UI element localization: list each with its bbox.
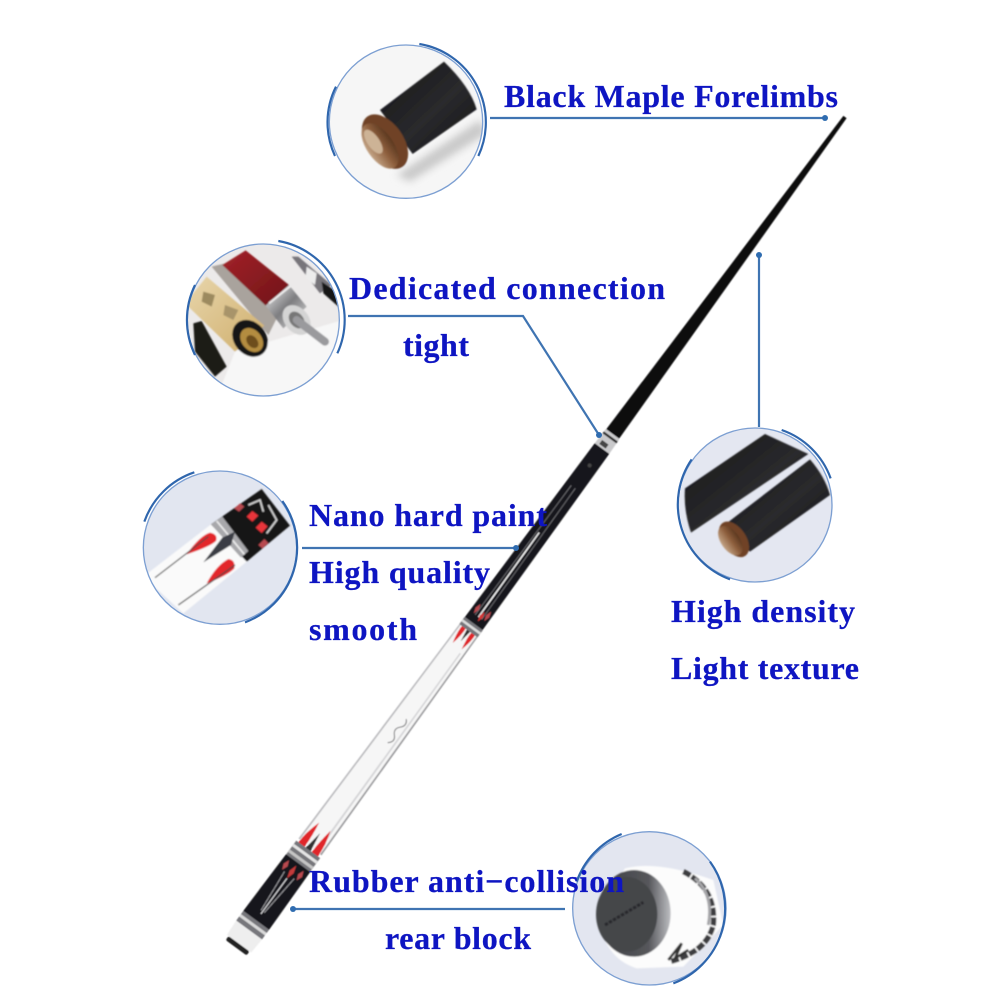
label: black maple forelimbs: Black Maple Forelimbs xyxy=(504,78,838,114)
white butt sleeve with red flames xyxy=(297,622,480,858)
lower black wrap xyxy=(243,854,311,930)
butt ring xyxy=(236,911,269,939)
photo circle: rubber rear block xyxy=(573,832,726,985)
label: rubber anti-collision rear block: Rubber anti−collision xyxy=(309,863,624,899)
callout line: black maple forelimbs xyxy=(490,115,828,121)
label: high density light texture: High density xyxy=(671,593,855,629)
callout line: dedicated connection xyxy=(348,316,602,438)
label: high density light texture: Light texture xyxy=(671,650,859,686)
label: rubber anti-collision rear block xyxy=(309,863,624,956)
photo circle: nano paint inlay xyxy=(143,471,297,624)
joint: silver connection xyxy=(595,429,620,454)
label: nano hard paint high quality smooth: High quality xyxy=(309,554,490,590)
photo circle: shaft pair xyxy=(678,428,832,582)
label: dedicated connection tight xyxy=(349,270,665,363)
billiard cue xyxy=(223,108,858,957)
white butt cap xyxy=(226,921,262,953)
butt collar xyxy=(286,841,320,872)
photo circle: shaft tip xyxy=(328,44,487,198)
cue shaft: black maple forelimb xyxy=(606,112,851,439)
infographic canvas xyxy=(142,42,858,986)
photo circle: joint connection xyxy=(185,241,348,402)
label: nano hard paint high quality smooth: smooth xyxy=(309,611,417,647)
forearm with inlay lines xyxy=(465,442,611,630)
label: dedicated connection tight: tight xyxy=(403,327,469,363)
callout line: rubber rear block xyxy=(290,906,565,912)
label: nano hard paint high quality smooth: Nano hard paint xyxy=(309,497,547,533)
label: nano hard paint high quality smooth xyxy=(309,497,547,647)
callout line: high density xyxy=(756,252,762,427)
label: rubber anti-collision rear block: rear block xyxy=(385,920,531,956)
label: high density light texture xyxy=(671,593,859,686)
decorative collar xyxy=(459,617,483,637)
rubber bumper xyxy=(226,936,250,955)
label: dedicated connection tight: Dedicated connection xyxy=(349,270,665,306)
callout line: nano hard paint xyxy=(302,545,519,551)
